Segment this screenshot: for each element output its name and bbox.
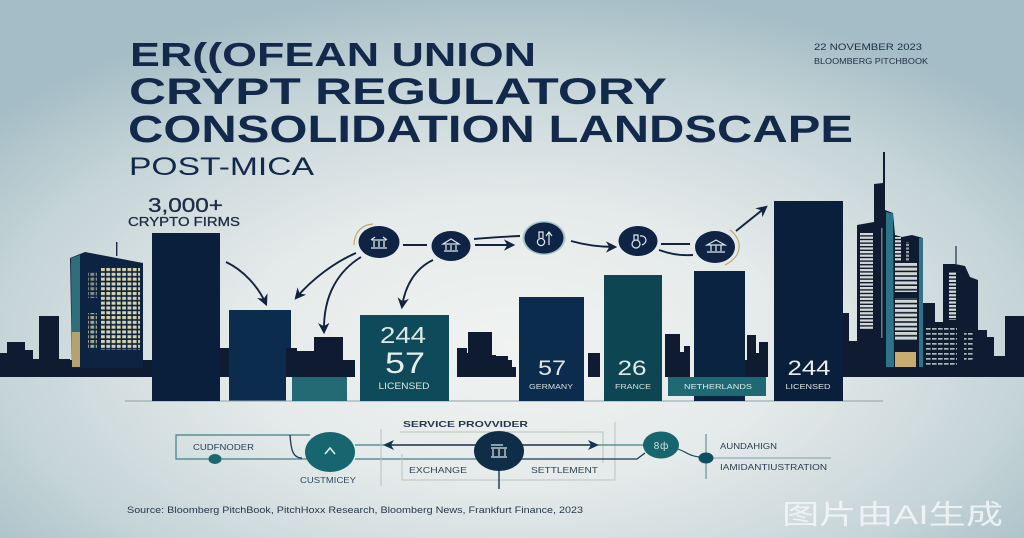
baseline (125, 400, 883, 402)
double arrow (383, 440, 599, 450)
watermark: 图片由AI生成 (782, 500, 1003, 530)
service provider node (474, 431, 524, 489)
skyline: left (0, 316, 768, 377)
heading: service provider: SERVICE PROVVIDER (403, 419, 528, 429)
audit node: 8 ф (654, 440, 668, 452)
bar: teal step (292, 377, 347, 401)
bar: Germany: 57 (538, 357, 566, 380)
connector lines (355, 422, 645, 486)
callout: 3,000+ crypto firms: 3,000+ (148, 195, 223, 217)
panel: licensed (360, 315, 449, 401)
bar: France: 26 (618, 357, 646, 380)
icon: node 1 bank (354, 224, 400, 258)
title: ER((OFEAN UNION (130, 36, 536, 73)
audit node (643, 432, 679, 458)
panel: licensed: 57 (385, 347, 425, 380)
bar: Germany (519, 297, 584, 401)
customer node (305, 432, 355, 472)
flow diagram (176, 419, 831, 489)
title: CRYPT REGULATORY (129, 71, 667, 112)
bar: licensed total: 244 (788, 357, 831, 380)
date and publisher: 22 NOVEMBER 2023 (814, 42, 922, 52)
icon: node 2 bank (432, 231, 470, 261)
title (128, 36, 853, 181)
audit label: AUNDAHIGN (720, 442, 777, 451)
arrows (226, 207, 766, 332)
bar: licensed total: LICENSED (786, 382, 831, 391)
settlement label: SETTLEMENT (531, 465, 598, 475)
callout: 3,000+ crypto firms: CRYPTO FIRMS (128, 215, 240, 229)
callout: 3,000+ crypto firms (128, 195, 240, 229)
administration label: IAMIDANTIUSTRATION (720, 463, 827, 472)
panel: licensed: LICENSED (378, 381, 430, 391)
bar: Germany: GERMANY (529, 382, 573, 391)
bar: second step (229, 310, 291, 401)
office tower left (70, 242, 143, 368)
customer box: CUDFNODER (193, 442, 254, 452)
bar: Netherlands: NETHERLANDS (684, 382, 752, 391)
administration junction (678, 434, 831, 479)
customer label: CUSTMICEY (300, 475, 356, 485)
customer box (176, 435, 310, 464)
icon: node 3 key (522, 221, 566, 255)
title: CONSOLIDATION LANDSCAPE (128, 109, 853, 151)
bar: France: FRANCE (615, 382, 651, 391)
icon: node 5 bank (695, 230, 739, 265)
panel: licensed: 244 (380, 322, 426, 348)
bar: France (604, 275, 662, 401)
skyline: right with towers (843, 152, 1024, 377)
date and publisher (814, 42, 929, 66)
source note: Source: Bloomberg PitchBook, PitchHoxx Research, Bloomberg News, Frankfurt Finance, 2023 (127, 505, 583, 515)
exchange label: EXCHANGE (409, 465, 467, 475)
bar: licensed total (774, 201, 843, 401)
title: POST-MICA (129, 153, 314, 181)
bar: Netherlands (668, 271, 766, 401)
date and publisher: BLOOMBERG PITCHBOOK (814, 57, 929, 66)
bar: total firms (152, 233, 220, 401)
icon: node 4 key (618, 226, 658, 256)
